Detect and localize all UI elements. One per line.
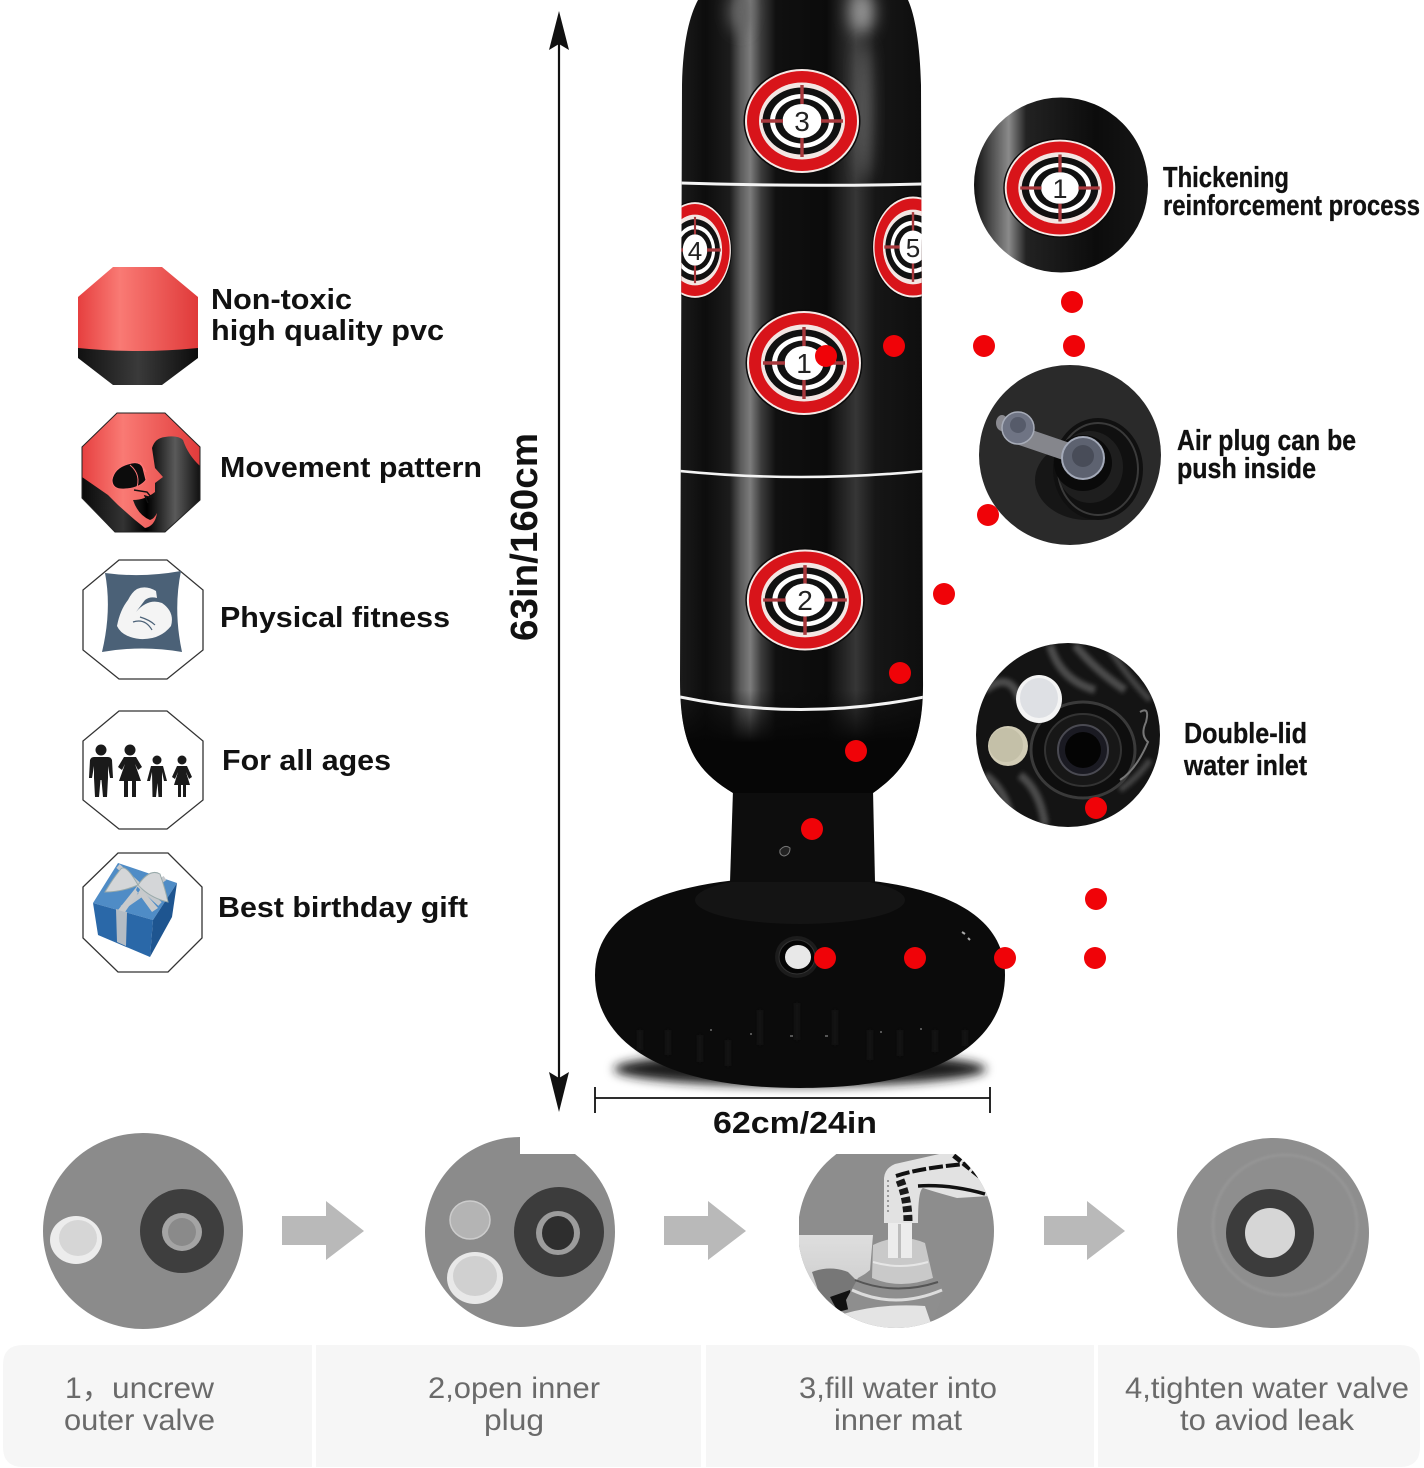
panel: step 3 caption [706,1345,1094,1467]
panel: step 1 caption: uncrew [112,1372,214,1405]
width label: 62cm/24in [713,1105,877,1140]
bag body [680,0,924,793]
detail circle with valve [975,360,1165,550]
label: Best birthday gift [218,892,468,924]
panel: step 1 caption [3,1345,312,1467]
panel: step 4 caption: 4,tighten water valve [1125,1372,1409,1405]
punching bag product [595,0,1005,1088]
arrow 1 [282,1201,364,1260]
detail: thickening reinforcement [974,98,1420,272]
panel: step 2 caption [316,1345,701,1467]
label: Double-lid [1184,718,1307,750]
step 1 photo: uncrew valve [43,1133,243,1329]
step 4 photo: tighten valve [1177,1138,1369,1328]
detail circle with lids [970,640,1165,830]
hand [795,1235,873,1310]
label: For all ages [222,745,391,777]
red decorative dots [801,291,1107,969]
detail: double lid inlet [970,640,1307,830]
detail circle with target [974,98,1148,272]
detail: air plug [975,360,1356,550]
step caption panels [3,1345,1420,1467]
panel: step 1 caption: 1， [65,1372,112,1405]
target 4 [681,201,732,299]
panel: step 3 caption: 3,fill water into [799,1372,997,1405]
label: push inside [1177,453,1316,485]
arrow 3 [1044,1201,1125,1260]
label [1163,162,1420,222]
height dimension arrow [549,11,569,1112]
label [211,284,444,347]
label: Movement pattern [220,452,482,484]
feature: for all ages [83,711,391,829]
target 4: 4 [688,236,702,266]
neck [730,790,875,882]
label: water inlet [1183,750,1307,782]
panel: step 2 caption: plug [484,1404,544,1437]
icon: red and black material [78,267,198,385]
target 1: 1 [796,348,812,379]
label: Non-toxic [211,284,352,316]
panel: step 4 caption: to aviod leak [1180,1404,1355,1437]
target 2 [745,548,865,652]
label [1177,425,1356,485]
label: Physical fitness [220,602,450,634]
target 5: 5 [906,233,920,263]
floor shadow [614,1052,986,1086]
panel: step 1 caption: outer valve [64,1404,215,1437]
icon: gift box [83,853,202,972]
target 5 [872,196,922,298]
detail circle with target: 1 [1052,174,1068,204]
faucet [884,1150,990,1223]
band lines [680,183,924,710]
height label: 63in/160cm [504,433,546,641]
feature: birthday gift [83,853,468,972]
feature: non-toxic pvc [78,267,444,385]
panel: step 4 caption [1098,1345,1420,1467]
label: high quality pvc [211,315,444,347]
step 3 photo: fill water [799,1154,994,1328]
icon: family [83,711,203,829]
octagon outline [82,413,200,532]
feature: movement pattern [81,413,482,533]
label: Thickening [1163,162,1289,194]
base ring [595,876,1005,1088]
panel: step 2 caption: 2,open inner [428,1372,600,1405]
target 3 [744,68,860,174]
icon: bicep [83,560,203,679]
target 3: 3 [794,106,810,137]
arrow 2 [664,1201,746,1260]
step 2 photo: open inner plug [425,1137,615,1327]
base air valve button [775,936,819,978]
lower hand [845,1305,930,1328]
icon: boxer silhouette [81,413,201,533]
target 2: 2 [797,585,813,616]
panel: step 3 caption: inner mat [834,1404,963,1437]
feature: physical fitness [83,560,450,679]
target 1 [746,310,862,416]
bottle [846,1274,866,1318]
label [1183,718,1307,782]
label: Air plug can be [1177,425,1356,457]
water [888,1222,912,1258]
width dimension line [595,1087,990,1113]
